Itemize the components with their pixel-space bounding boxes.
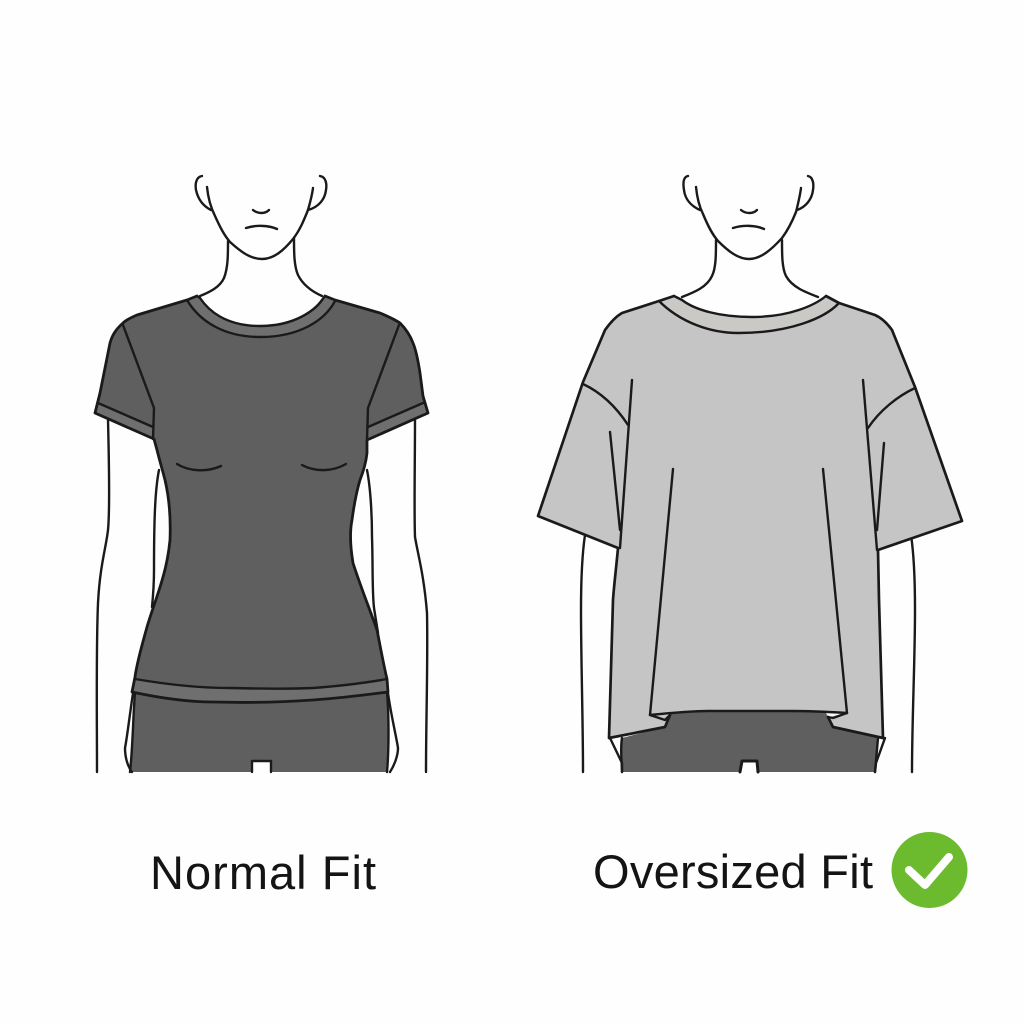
collar rib bbox=[659, 296, 839, 333]
hem rib bbox=[132, 679, 388, 702]
figure: normal fit bbox=[95, 176, 428, 772]
head and neck bbox=[682, 176, 818, 297]
shorts bbox=[125, 692, 398, 772]
label: normal fit: Normal Fit bbox=[150, 846, 376, 899]
figure: oversized fit bbox=[538, 176, 962, 772]
label: oversized fit: Oversized Fit bbox=[593, 845, 873, 898]
t-shirt: dark fitted bbox=[95, 296, 428, 702]
arms bbox=[581, 535, 915, 772]
head and neck bbox=[196, 176, 326, 296]
shorts bbox=[610, 711, 885, 772]
sleeve cuffs bbox=[95, 403, 154, 439]
shirt outline bbox=[95, 296, 428, 702]
arms bbox=[97, 420, 427, 772]
shirt outline bbox=[538, 296, 674, 738]
icon: green check badge bbox=[892, 832, 968, 908]
t-shirt: light oversized bbox=[538, 296, 962, 738]
collar rib bbox=[187, 296, 335, 337]
